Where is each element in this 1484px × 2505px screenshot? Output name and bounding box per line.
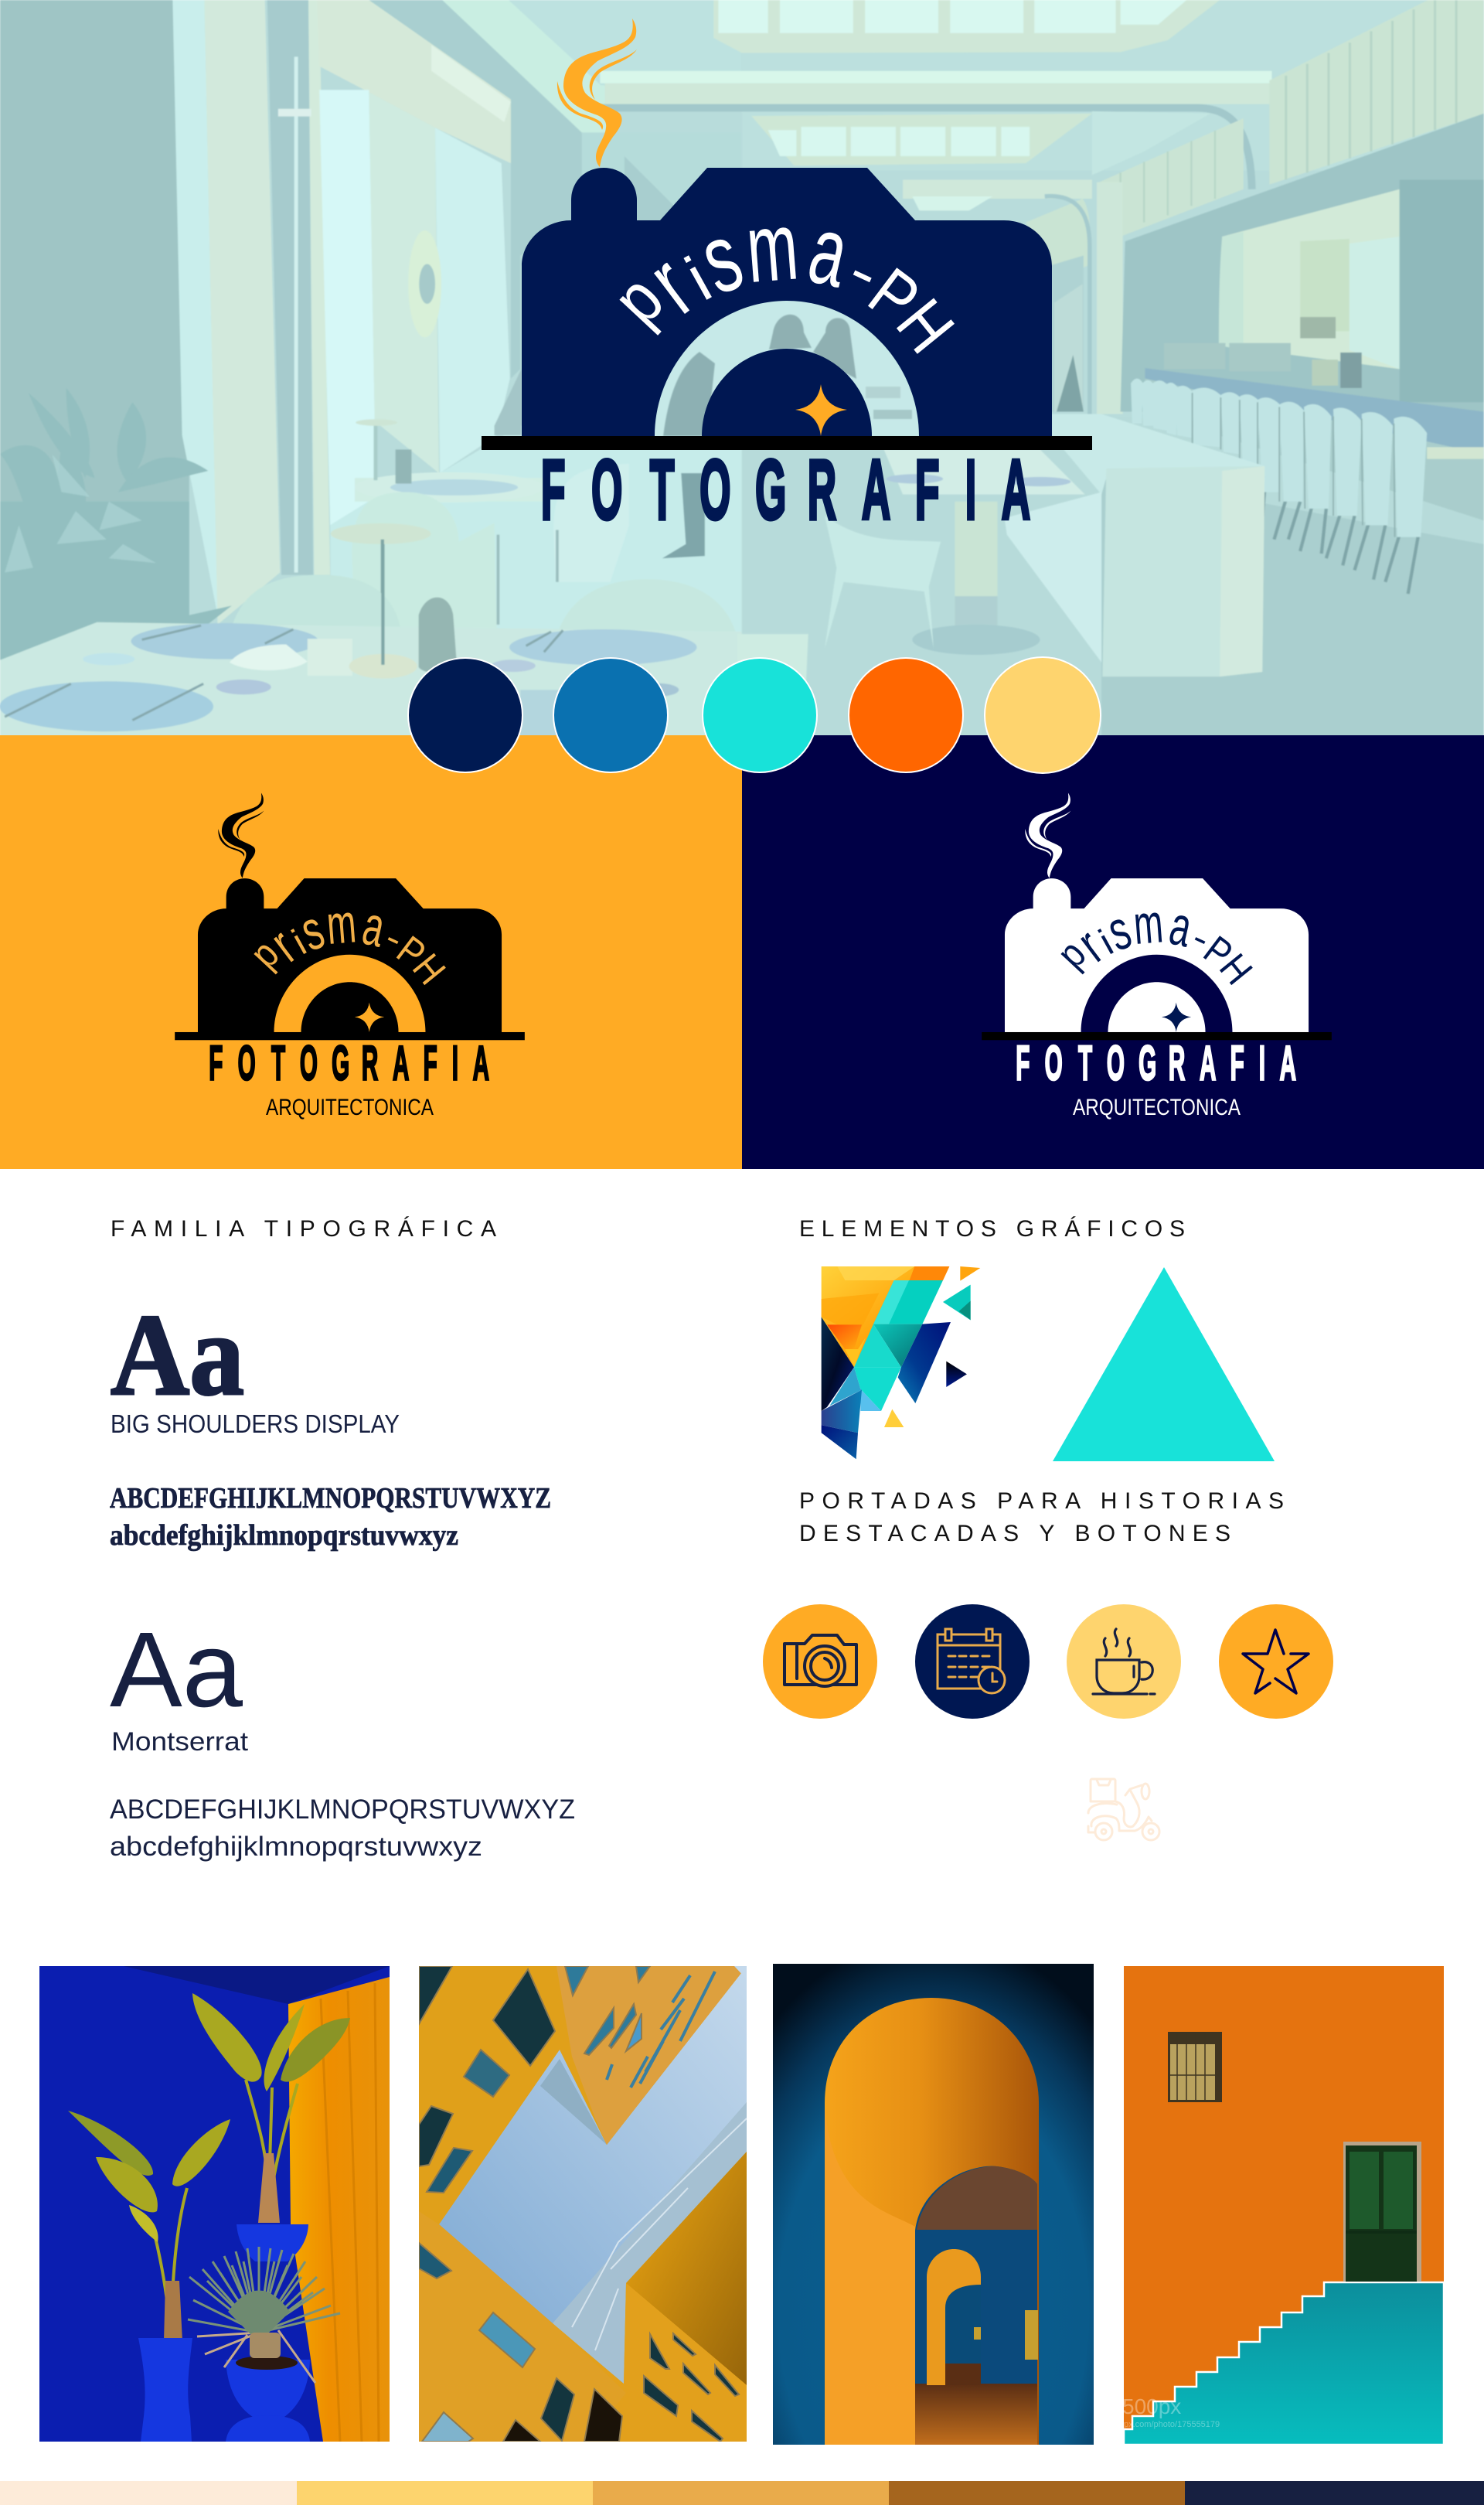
graphic: turquoise triangle [1053,1267,1275,1461]
logo on orange: black version [175,793,525,1090]
photo: blue wall with plants and orange curtain [39,1966,390,2442]
graphic: prism shards [822,1266,980,1459]
camera body silhouette [198,878,502,1032]
panel: orange background [0,735,742,1169]
pots [138,2224,310,2442]
display font uppercase alphabet: ABCDEFGHIJKLMNOPQRSTUVWXYZ [110,1482,551,1515]
icon: black smoke [218,793,264,878]
arched wordmark prisma-PH: a [1164,894,1198,959]
caption: portadas para historias destacadas y botones: DESTACADAS Y BOTONES [799,1521,1230,1546]
lens [301,982,399,1032]
arched wordmark prisma-PH: s [293,898,332,963]
arched wordmark prisma-PH: a [357,894,391,959]
caption: portadas para historias destacadas y botones: PORTADAS PARA HISTORIAS [799,1488,1284,1514]
arched wordmark prisma-PH: - [839,235,890,308]
arched wordmark prisma-PH: H [1210,946,1261,993]
colour strip at bottom [0,2481,1484,2505]
icon button: star [1219,1604,1333,1719]
arched wordmark prisma-PH: s [687,202,755,315]
dining table and chair [884,449,1085,495]
arched wordmark prisma-PH: H [403,946,454,993]
bar stools [1261,489,1418,594]
arched wordmark prisma-PH: r [628,233,711,333]
sans font specimen Aa: Aa [110,1610,243,1730]
black bar [482,436,1092,450]
sans font lowercase alphabet: abcdefghijklmnopqrstuvwxyz [110,1832,482,1862]
wordmark FOTOGRAFIA: FOTOGRAFIA [209,1036,489,1090]
wordmark FOTOGRAFIA: FOTOGRAFIA [1016,1036,1296,1090]
tagline ARQUITECTONICA on orange: ARQUITECTONICA [266,1095,434,1120]
lens [1108,982,1206,1032]
black bar [982,1032,1332,1040]
arched wordmark prisma-PH: i [285,922,313,963]
camera body silhouette [522,168,1052,436]
tagline ARQUITECTONICA on navy: ARQUITECTONICA [1073,1095,1241,1120]
lens [702,349,872,436]
sans font uppercase alphabet: ABCDEFGHIJKLMNOPQRSTUVWXYZ [110,1794,575,1825]
front table [0,622,742,742]
booth [1052,414,1264,495]
windows [419,1966,739,2442]
caption: portadas para historias destacadas y botones [799,1488,1284,1546]
panel: navy background [742,735,1484,1169]
photo watermark: px.com/photo/175555179 [1124,2420,1220,2429]
icon: orange smoke [557,19,637,167]
display font lowercase alphabet: abcdefghijklmnopqrstuvwxyz [110,1519,458,1552]
arched wordmark prisma-PH: m [325,892,358,956]
logo on navy: white version [982,793,1332,1090]
arched wordmark prisma-PH: m [743,192,802,304]
photo watermark [1124,2398,1220,2429]
arched wordmark prisma-PH [598,192,969,367]
photo: blue museum walls with orange arches [773,1964,1094,2445]
colour palette swatches [408,657,1101,773]
arched wordmark prisma-PH: p [598,261,679,339]
heading: familia tipográfica: FAMILIA TIPOGRÁFICA [111,1216,496,1242]
backdrop seen through the lens ring [655,301,919,436]
arched wordmark prisma-PH: a [800,196,858,308]
icon: navy star [1162,1003,1191,1032]
stems [154,2080,299,2298]
icon: white smoke [1025,793,1070,878]
arched wordmark prisma-PH: m [1132,892,1165,956]
heading: elementos gráficos: ELEMENTOS GRÁFICOS [799,1216,1185,1242]
leaves [68,1993,350,2242]
black bar [175,1032,525,1040]
arched wordmark prisma-PH: s [1100,898,1139,963]
arched wordmark prisma-PH: - [1186,917,1216,959]
arched wordmark prisma-PH: H [882,285,969,367]
arched wordmark prisma-PH: P [389,928,433,976]
photo: yellow buildings and sky [419,1966,747,2442]
sans font name: Montserrat [111,1727,249,1757]
arched wordmark prisma-PH: P [1196,928,1240,976]
arched wordmark prisma-PH: - [380,917,409,959]
floor [815,734,1102,735]
camera body silhouette [1005,878,1309,1032]
photo: orange wall with turquoise staircase [1122,1966,1444,2445]
display font name: BIG SHOULDERS DISPLAY [111,1409,400,1438]
arched wordmark prisma-PH: p [242,932,288,976]
spiky plant [188,2247,340,2383]
icon: orange star [355,1003,384,1032]
wordmark FOTOGRAFIA: FOTOGRAFIA [541,442,1030,537]
plant in left corner [0,388,232,663]
icon button: coffee cup [1067,1604,1181,1719]
arched wordmark prisma-PH: P [855,253,934,339]
icon button: calendar [915,1604,1030,1719]
arched wordmark prisma-PH: i [675,244,723,315]
panel: restaurant interior photo with teal wash [0,0,1484,742]
icon button: camera [763,1604,877,1719]
arched wordmark prisma-PH [242,892,454,993]
icon: faded delivery scooter [1088,1779,1159,1840]
arched wordmark prisma-PH: r [1067,917,1114,973]
arched wordmark prisma-PH [1049,892,1261,993]
bar alcove [1121,114,1484,411]
icon: orange star [795,384,847,436]
display font specimen Aa: Aa [111,1290,244,1420]
arched wordmark prisma-PH: i [1092,922,1120,963]
main logo: camera with smoke [482,19,1092,537]
photo watermark: 500px [1122,2394,1181,2418]
midground floor and furniture [330,426,742,634]
ceiling skylight [742,0,1484,170]
arched wordmark prisma-PH: p [1049,932,1094,976]
arched wordmark prisma-PH: r [260,917,307,973]
